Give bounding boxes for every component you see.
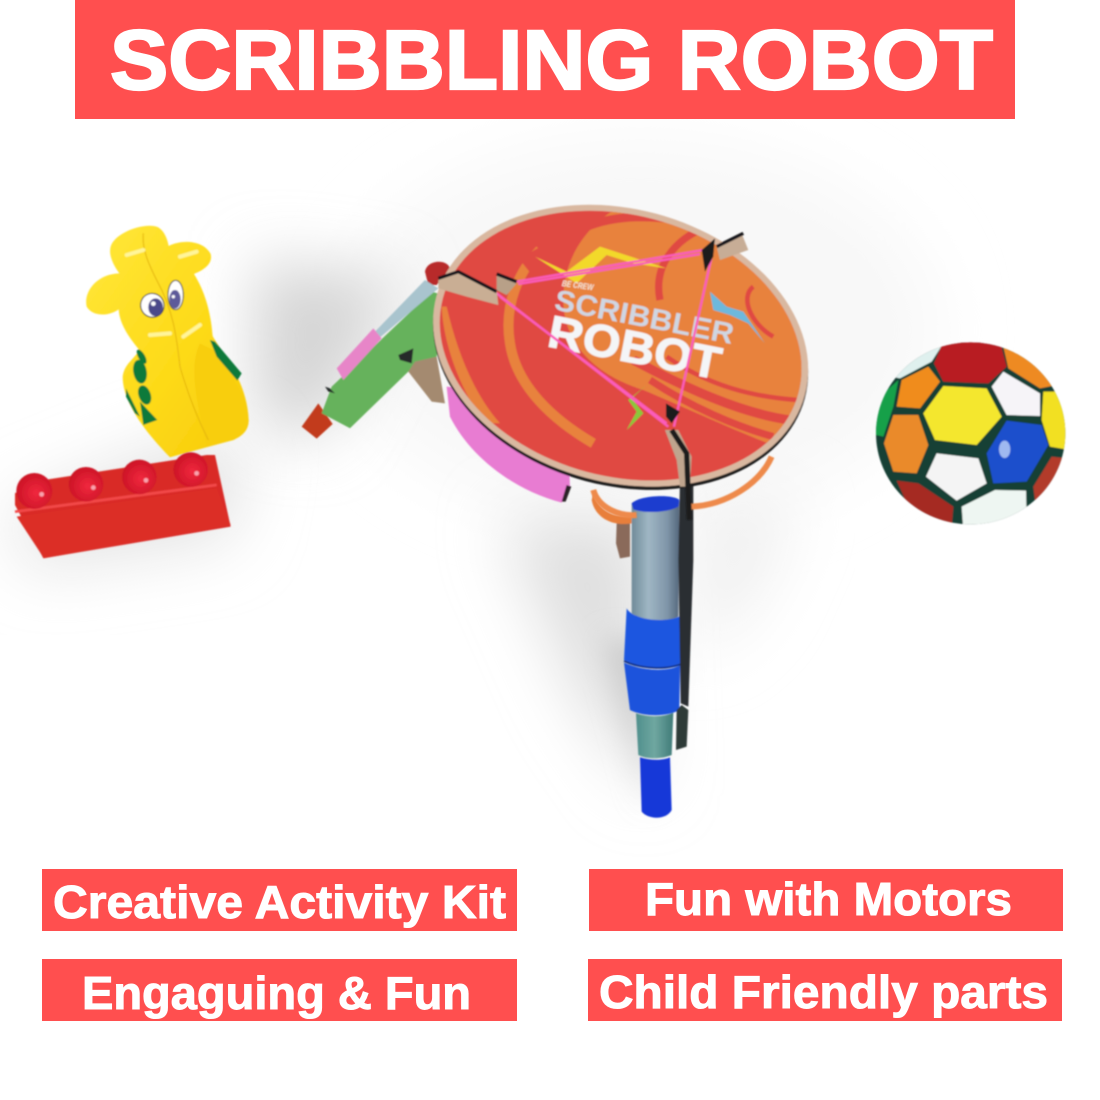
pink foam under disc (447, 387, 570, 503)
soft shadows on background (10, 140, 940, 810)
disc lettering: ROBOT (544, 306, 726, 389)
red cap (425, 262, 450, 285)
robot pen (592, 480, 693, 818)
label: Child Friendly parts: Child Friendly parts (599, 966, 1048, 1018)
disc lettering (544, 278, 737, 389)
spots (126, 340, 242, 425)
label: Fun with Motors: Fun with Motors (645, 873, 1012, 925)
disc artwork (441, 212, 802, 448)
disc red face (409, 172, 832, 519)
rubber band (497, 250, 712, 427)
label: Engaguing & Fun: Engaguing & Fun (82, 967, 471, 1019)
lightning accents (535, 247, 667, 283)
disc lettering: BE CREW (561, 278, 595, 292)
disc lettering: SCRIBBLER (552, 284, 737, 351)
eyes (137, 280, 183, 321)
icon: red toy brick (15, 452, 231, 558)
illustration: scribbling robot (301, 204, 810, 819)
orange wire (593, 457, 772, 515)
label: Fun with Motors (589, 869, 1063, 931)
icon: giraffe toy (86, 226, 249, 457)
disc edge (401, 168, 840, 530)
label: Creative Activity Kit: Creative Activity Kit (53, 876, 506, 928)
red pen stub (302, 403, 333, 439)
robot body and disc (301, 204, 810, 520)
label: Engaguing & Fun (42, 959, 517, 1021)
wood tabs (438, 233, 748, 520)
icon: soccer ball (870, 342, 1070, 530)
green side panel (322, 292, 443, 428)
title banner: SCRIBBLING ROBOT (110, 13, 993, 107)
